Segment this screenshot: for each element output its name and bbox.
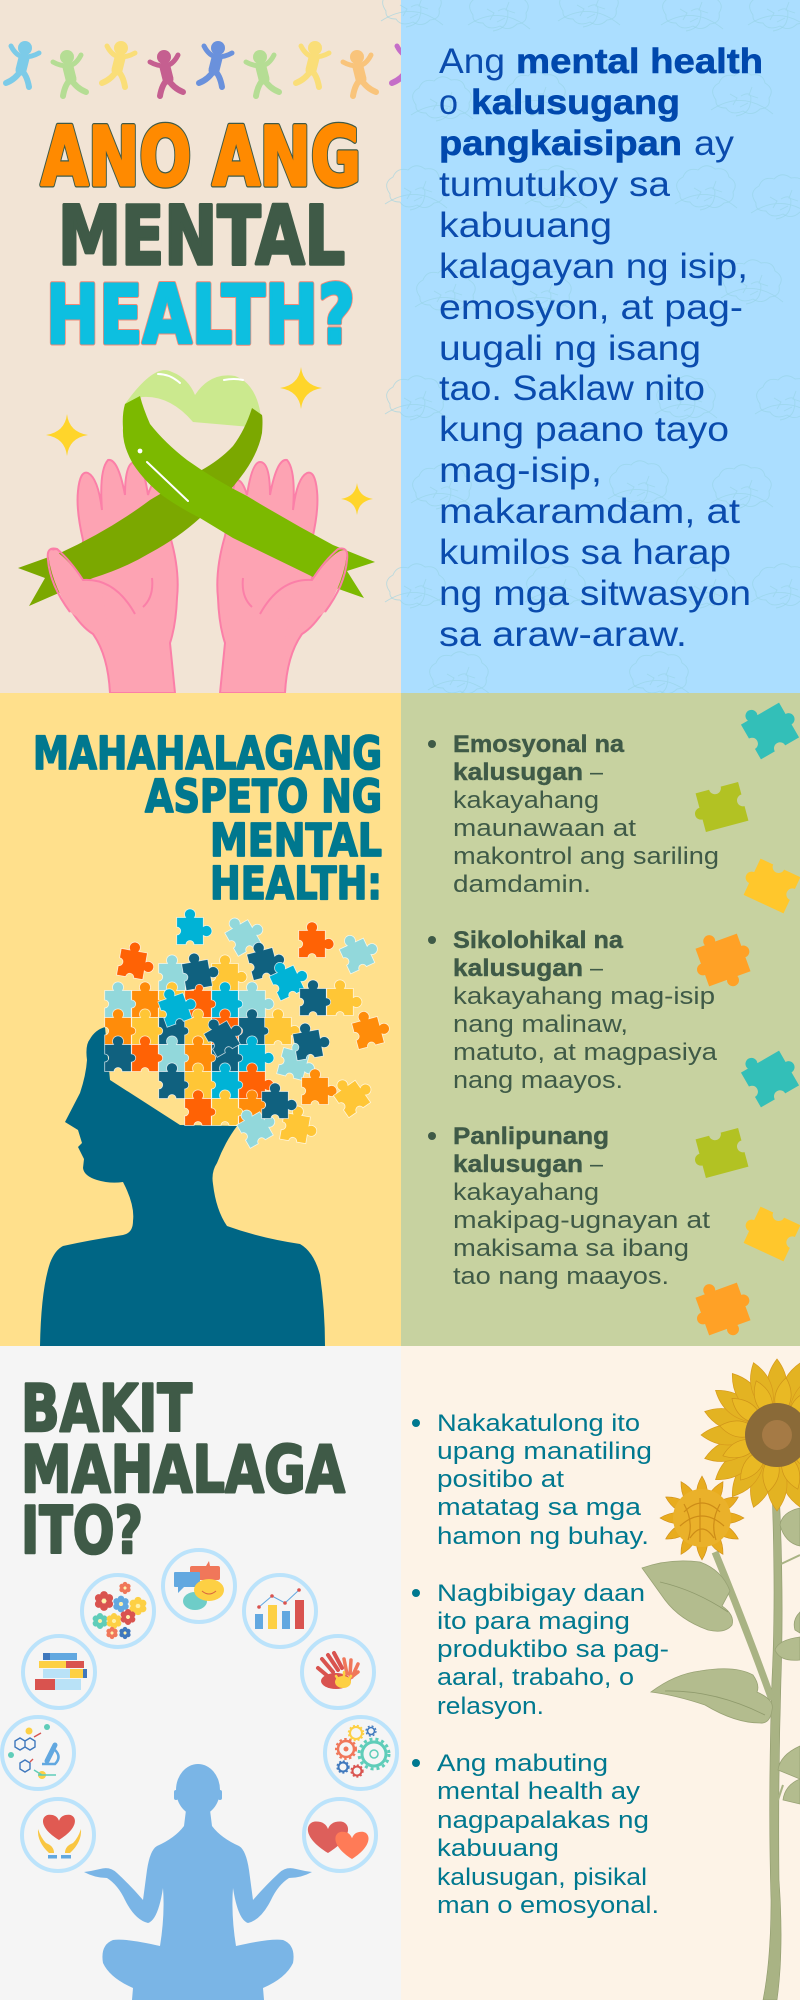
- definition text: mental health: [516, 42, 763, 81]
- definition text: emosyon, at pag-: [439, 288, 743, 327]
- list item: Emosyonal na kalusugan: kakayahang: [453, 787, 599, 814]
- definition text: tumutukoy sa: [439, 165, 671, 204]
- list item: be productive: Nagbibigay daan: [437, 1580, 645, 1607]
- background pattern: brains and ribbons: [381, 0, 800, 696]
- list item: stay positive: hamon ng buhay.: [437, 1523, 649, 1550]
- icon rings: [2, 1550, 397, 1871]
- list item: Sikolohikal na kalusugan: [428, 927, 718, 1094]
- icon: two hearts: [308, 1822, 369, 1859]
- panel: reasons list with sunflower: [401, 1346, 800, 2000]
- definition text: pangkaisipan: [439, 124, 682, 163]
- icon: overlapping hands: [318, 1653, 358, 1689]
- panel: important aspects heading and head illustration: [0, 693, 401, 1346]
- list item: Sikolohikal na kalusugan: kalusugan: [453, 955, 583, 982]
- definition text: [439, 42, 763, 654]
- panel: what is mental health title: [0, 0, 425, 693]
- icon: hands holding green ribbon: [18, 370, 375, 693]
- list item: Panlipunang kalusugan: makisama sa ibang: [453, 1235, 689, 1262]
- list item: be productive: relasyon.: [437, 1693, 544, 1720]
- list item: Sikolohikal na kalusugan: nang maayos.: [453, 1067, 623, 1094]
- list item: Sikolohikal na kalusugan: kakayahang mag-isip: [453, 983, 715, 1010]
- definition text: ay: [694, 124, 735, 163]
- definition text: sa araw-araw.: [439, 615, 687, 654]
- definition text: kabuuang: [439, 206, 612, 245]
- list item: Panlipunang kalusugan: makipag-ugnayan at: [453, 1207, 710, 1234]
- list item: be productive: ito para maging: [437, 1608, 630, 1635]
- puzzle brain grid: [105, 955, 300, 1126]
- list item: strengthens overall health: man o emosyonal.: [437, 1892, 659, 1919]
- meditating figure: [84, 1764, 312, 2000]
- definition text: kumilos sa harap: [439, 533, 731, 572]
- definition text: Ang: [439, 42, 505, 81]
- title: Ano ang Mental Health: HEALTH?: [46, 269, 355, 363]
- list item: strengthens overall health: kabuuang: [437, 1835, 559, 1862]
- list item: Panlipunang kalusugan: kakayahang: [453, 1179, 599, 1206]
- list item: stay positive: positibo at: [437, 1466, 564, 1493]
- panel: why it is important, heading and icons: [0, 1346, 401, 2000]
- icon: chat bubbles: [174, 1561, 224, 1610]
- heading: Mahahalagang aspeto ng mental health: ASPETO NG: [145, 770, 382, 823]
- icon: flowers: [93, 1582, 146, 1639]
- list item: strengthens overall health: [412, 1750, 659, 1919]
- heading: Mahahalagang aspeto ng mental health: MENTAL: [210, 814, 382, 867]
- definition text: kung paano tayo: [439, 410, 729, 449]
- list item: stay positive: Nakakatulong ito: [437, 1410, 640, 1437]
- list item: strengthens overall health: nagpapalakas ng: [437, 1807, 649, 1834]
- title: Ano ang Mental Health: [41, 111, 361, 363]
- panel: definition of mental health: [381, 0, 800, 696]
- list item: Panlipunang kalusugan: Panlipunang: [453, 1123, 609, 1150]
- list item: be productive: aaral, trabaho, o: [437, 1664, 634, 1691]
- list item: Panlipunang kalusugan: –: [590, 1151, 604, 1178]
- icon: sparkle stars: [46, 367, 373, 515]
- list item: Sikolohikal na kalusugan: matuto, at magpasiya: [453, 1039, 718, 1066]
- definition text: uugali ng isang: [439, 329, 701, 368]
- icon: gears: [336, 1726, 389, 1777]
- title: Ano ang Mental Health: ANO ANG: [41, 111, 361, 205]
- list item: be productive: produktibo sa pag-: [437, 1636, 669, 1663]
- heading: Bakit mahalaga ito: [21, 1372, 345, 1569]
- definition text: tao. Saklaw nito: [439, 369, 705, 408]
- heading: Bakit mahalaga ito: BAKIT: [21, 1372, 192, 1447]
- list item: Panlipunang kalusugan: tao nang maayos.: [453, 1263, 669, 1290]
- list item: Emosyonal na kalusugan: –: [590, 759, 604, 786]
- list item: Emosyonal na kalusugan: maunawaan at: [453, 815, 636, 842]
- list item: stay positive: matatag sa mga: [437, 1494, 642, 1521]
- icon: bar chart: [255, 1588, 304, 1629]
- list item: Emosyonal na kalusugan: damdamin.: [453, 871, 591, 898]
- list item: Sikolohikal na kalusugan: –: [590, 955, 604, 982]
- definition text: makaramdam, at: [439, 492, 740, 531]
- loose puzzle pieces: [117, 908, 393, 1148]
- title: Ano ang Mental Health: HEALTH?: [46, 269, 355, 363]
- list item: Emosyonal na kalusugan: [428, 731, 719, 898]
- icon: heart in hands: [38, 1815, 81, 1858]
- list item: Panlipunang kalusugan: [428, 1123, 710, 1290]
- list item: Sikolohikal na kalusugan: nang malinaw,: [453, 1011, 628, 1038]
- heading: Mahahalagang aspeto ng mental health: MAHAHALAGANG: [33, 727, 382, 780]
- heading: Bakit mahalaga ito: ITO?: [21, 1494, 143, 1569]
- illustration: sunflower plant: [642, 1359, 800, 2000]
- list item: Emosyonal na kalusugan: makontrol ang sariling: [453, 843, 719, 870]
- definition text: ng mga sitwasyon: [439, 574, 751, 613]
- title: Ano ang Mental Health: ANO ANG: [41, 111, 361, 205]
- row of colourful people: [6, 41, 425, 96]
- icon: science microscope and molecules: [8, 1724, 58, 1779]
- list item: stay positive: [412, 1410, 652, 1550]
- definition text: mag-isip,: [439, 451, 602, 490]
- panel: three aspects list: [401, 692, 800, 1346]
- heading: Bakit mahalaga ito: MAHALAGA: [21, 1433, 345, 1508]
- list item: strengthens overall health: Ang mabuting: [437, 1750, 608, 1777]
- list item: be productive: [412, 1580, 669, 1720]
- icon: stack of books: [35, 1653, 87, 1690]
- list item: Panlipunang kalusugan: kalusugan: [453, 1151, 583, 1178]
- head silhouette: [40, 1027, 325, 1346]
- definition text: kalagayan ng isip,: [439, 247, 748, 286]
- decorative large puzzle pieces: [687, 692, 800, 1345]
- list item: strengthens overall health: kalusugan, pisikal: [437, 1864, 647, 1891]
- list item: Emosyonal na kalusugan: Emosyonal na: [453, 731, 625, 758]
- heading: Mahahalagang aspeto ng mental health: HEALTH:: [210, 857, 382, 910]
- definition text: kalusugang: [471, 83, 680, 122]
- list item: strengthens overall health: mental health ay: [437, 1778, 640, 1805]
- list item: Emosyonal na kalusugan: kalusugan: [453, 759, 583, 786]
- heading: Mahahalagang aspeto ng mental health: [33, 727, 382, 910]
- title: Ano ang Mental Health: MENTAL: [58, 190, 345, 284]
- list item: stay positive: upang manatiling: [437, 1438, 652, 1465]
- list item: Sikolohikal na kalusugan: Sikolohikal na: [453, 927, 624, 954]
- definition text: o: [439, 83, 458, 122]
